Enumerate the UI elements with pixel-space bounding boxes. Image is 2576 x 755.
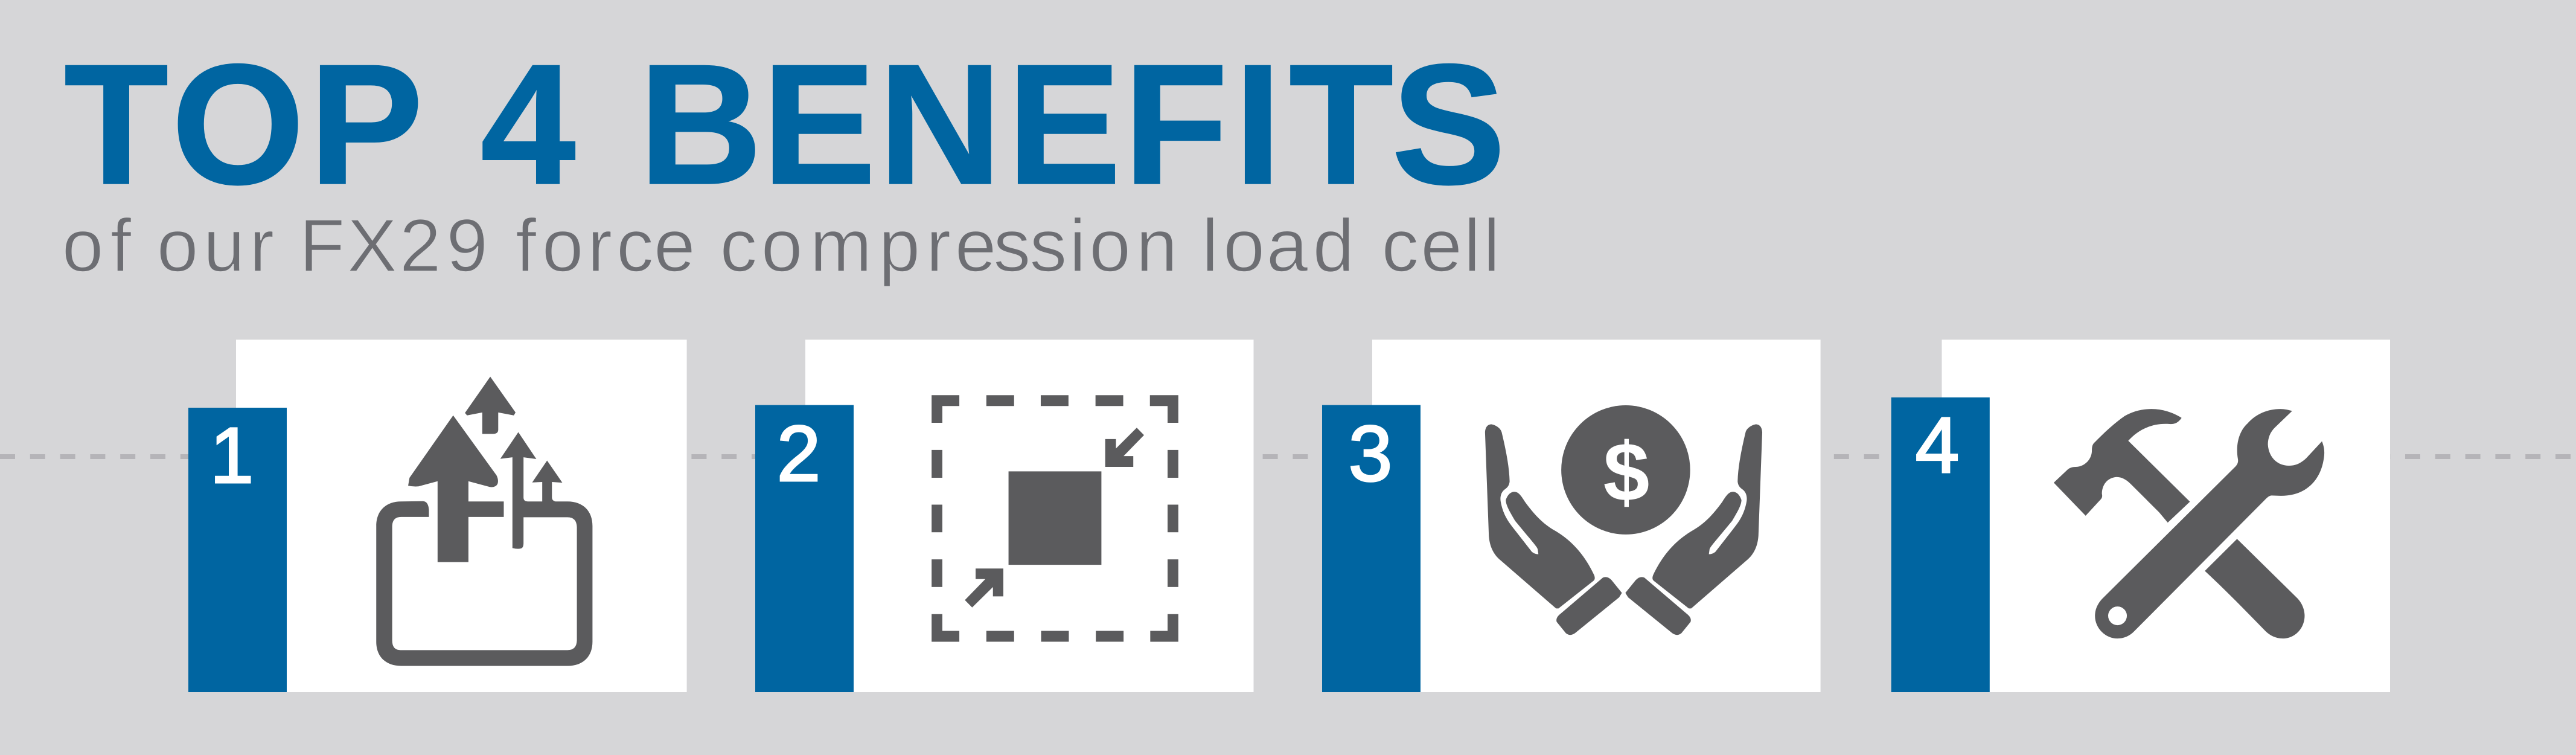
panel 3 white card [1372,339,1821,692]
number 1: 1 [210,411,254,500]
panel 4 number tab [1891,397,1990,692]
panel: benefit 1 [188,339,687,692]
icon: hands holding dollar coin [1485,405,1762,635]
subtitle: of our FX29 force compression load cell [62,204,1500,288]
number 4: 4 [1916,400,1959,489]
panel: benefit 3 [1322,339,1821,692]
panel: benefit 4 [1891,339,2390,692]
panel 1 white card [236,339,687,692]
number 2: 2 [777,409,820,498]
title: TOP 4 BENEFITS [64,29,1506,220]
icon: square compressed inside dashed frame [932,395,1178,641]
number 3: 3 [1349,409,1392,498]
panel 1 number tab [188,408,287,692]
icon: crossed hammer and wrench [2054,409,2324,638]
panel 3 number tab [1322,405,1421,692]
panel 2 white card [805,339,1253,692]
icon: hands holding dollar coin: $ [1603,426,1649,519]
panel: benefit 2 [755,339,1253,692]
panel 4 white card [1942,339,2390,692]
icon: arrows rising out of box [376,377,592,666]
panel 2 number tab [755,405,854,692]
